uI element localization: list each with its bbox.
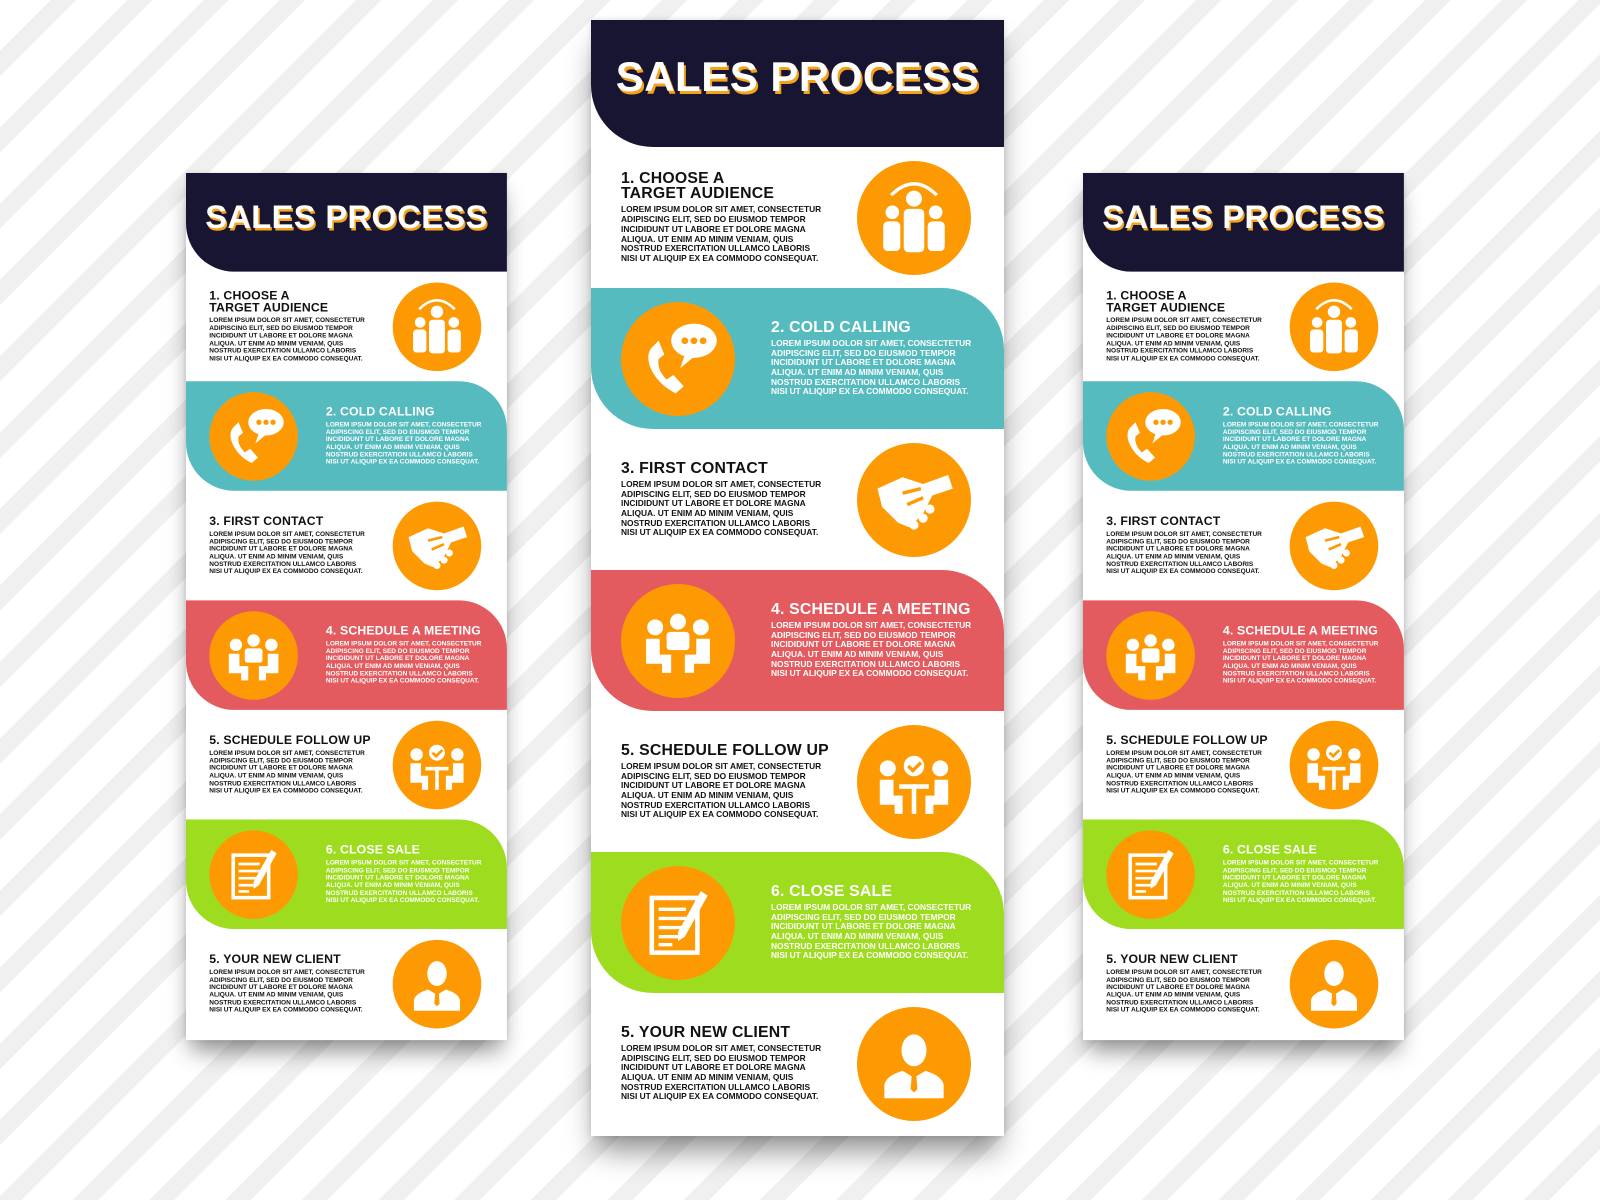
step 4: NISI UT ALIQUIP EX EA COMMODO CONSEQUAT. xyxy=(1223,677,1376,685)
step 5: LOREM IPSUM DOLOR SIT AMET, CONSECTETUR xyxy=(209,749,365,756)
step 5: NOSTRUD EXERCITATION ULLAMCO LABORIS xyxy=(621,800,810,810)
step 2: ADIPISCING ELIT, SED DO EIUSMOD TEMPOR xyxy=(1223,428,1366,435)
step 3: LOREM IPSUM DOLOR SIT AMET, CONSECTETUR xyxy=(1106,530,1262,537)
step 1: TARGET AUDIENCE xyxy=(621,185,774,202)
step 6: NOSTRUD EXERCITATION ULLAMCO LABORIS xyxy=(1223,888,1370,896)
step 4: ALIQUA. UT ENIM AD MINIM VENIAM, QUIS xyxy=(1223,662,1357,670)
step 4: NOSTRUD EXERCITATION ULLAMCO LABORIS xyxy=(771,659,960,669)
step 3: NOSTRUD EXERCITATION ULLAMCO LABORIS xyxy=(621,518,810,528)
step 7 xyxy=(1106,940,1378,1028)
step 7: 5. YOUR NEW CLIENT xyxy=(1106,953,1238,966)
step 5: ADIPISCING ELIT, SED DO EIUSMOD TEMPOR xyxy=(621,771,806,781)
step 4 xyxy=(591,570,1004,711)
step 4: LOREM IPSUM DOLOR SIT AMET, CONSECTETUR xyxy=(771,620,971,630)
step 7: LOREM IPSUM DOLOR SIT AMET, CONSECTETUR xyxy=(209,968,365,976)
step 5: ADIPISCING ELIT, SED DO EIUSMOD TEMPOR xyxy=(209,756,353,764)
step 6: INCIDIDUNT UT LABORE ET DOLORE MAGNA xyxy=(326,873,469,881)
step 5 xyxy=(209,720,482,810)
step 3: ADIPISCING ELIT, SED DO EIUSMOD TEMPOR xyxy=(621,489,806,499)
step 4: LOREM IPSUM DOLOR SIT AMET, CONSECTETUR xyxy=(326,639,481,647)
step 1: ALIQUA. UT ENIM AD MINIM VENIAM, QUIS xyxy=(1106,339,1240,347)
step 2: NISI UT ALIQUIP EX EA COMMODO CONSEQUAT. xyxy=(1223,458,1376,465)
step 7: NOSTRUD EXERCITATION ULLAMCO LABORIS xyxy=(209,998,356,1006)
step 7: INCIDIDUNT UT LABORE ET DOLORE MAGNA xyxy=(1106,983,1250,991)
step 5: INCIDIDUNT UT LABORE ET DOLORE MAGNA xyxy=(1106,764,1250,772)
step 6 xyxy=(1083,819,1404,929)
header: SALES PROCESS xyxy=(616,53,979,100)
step 2: ALIQUA. UT ENIM AD MINIM VENIAM, QUIS xyxy=(326,443,460,450)
step 1: NISI UT ALIQUIP EX EA COMMODO CONSEQUAT. xyxy=(209,354,363,362)
step 6: 6. CLOSE SALE xyxy=(326,843,420,857)
step 6: LOREM IPSUM DOLOR SIT AMET, CONSECTETUR xyxy=(326,858,481,866)
step 3: LOREM IPSUM DOLOR SIT AMET, CONSECTETUR xyxy=(209,530,365,537)
step 6: LOREM IPSUM DOLOR SIT AMET, CONSECTETUR xyxy=(1223,858,1378,866)
step 2 xyxy=(591,288,1004,429)
header: SALES PROCESS xyxy=(1102,199,1385,235)
step 3 xyxy=(621,443,971,557)
step 5: ADIPISCING ELIT, SED DO EIUSMOD TEMPOR xyxy=(1106,756,1250,764)
step 7: NISI UT ALIQUIP EX EA COMMODO CONSEQUAT. xyxy=(209,1005,363,1013)
step 5: INCIDIDUNT UT LABORE ET DOLORE MAGNA xyxy=(621,780,806,790)
header: SALES PROCESS xyxy=(205,199,488,235)
step 4 xyxy=(1083,600,1404,710)
step 7: INCIDIDUNT UT LABORE ET DOLORE MAGNA xyxy=(621,1062,806,1072)
step 5: INCIDIDUNT UT LABORE ET DOLORE MAGNA xyxy=(209,764,353,772)
step 1: NISI UT ALIQUIP EX EA COMMODO CONSEQUAT. xyxy=(1106,354,1260,362)
step 1: NOSTRUD EXERCITATION ULLAMCO LABORIS xyxy=(209,346,356,354)
step 1 xyxy=(209,282,482,372)
step 5: LOREM IPSUM DOLOR SIT AMET, CONSECTETUR xyxy=(621,761,821,771)
step 6: LOREM IPSUM DOLOR SIT AMET, CONSECTETUR xyxy=(771,902,971,912)
step 2: LOREM IPSUM DOLOR SIT AMET, CONSECTETUR xyxy=(326,420,481,428)
step 6: 6. CLOSE SALE xyxy=(1223,843,1317,857)
step 4: ADIPISCING ELIT, SED DO EIUSMOD TEMPOR xyxy=(1223,647,1366,654)
step 6: ADIPISCING ELIT, SED DO EIUSMOD TEMPOR xyxy=(1223,866,1366,874)
step 5: ALIQUA. UT ENIM AD MINIM VENIAM, QUIS xyxy=(209,771,343,779)
header xyxy=(1083,173,1404,272)
step 1: ADIPISCING ELIT, SED DO EIUSMOD TEMPOR xyxy=(621,214,806,224)
step 7: NISI UT ALIQUIP EX EA COMMODO CONSEQUAT. xyxy=(1106,1005,1260,1013)
step 4: 4. SCHEDULE A MEETING xyxy=(1223,624,1378,638)
step 1: ADIPISCING ELIT, SED DO EIUSMOD TEMPOR xyxy=(1106,324,1250,332)
step 5: ALIQUA. UT ENIM AD MINIM VENIAM, QUIS xyxy=(1106,771,1240,779)
step 5: 5. SCHEDULE FOLLOW UP xyxy=(1106,734,1268,747)
step 4: ALIQUA. UT ENIM AD MINIM VENIAM, QUIS xyxy=(771,649,943,659)
step 5: NISI UT ALIQUIP EX EA COMMODO CONSEQUAT. xyxy=(621,809,818,819)
step 4 xyxy=(186,600,507,710)
step 3: 3. FIRST CONTACT xyxy=(209,515,323,528)
step 7: LOREM IPSUM DOLOR SIT AMET, CONSECTETUR xyxy=(621,1043,821,1053)
step 1: 1. CHOOSE A xyxy=(621,170,724,187)
step 7: NOSTRUD EXERCITATION ULLAMCO LABORIS xyxy=(1106,998,1253,1006)
step 3: ADIPISCING ELIT, SED DO EIUSMOD TEMPOR xyxy=(209,537,353,545)
step 1: ALIQUA. UT ENIM AD MINIM VENIAM, QUIS xyxy=(209,339,343,347)
step 1: TARGET AUDIENCE xyxy=(209,302,328,315)
step 3: NISI UT ALIQUIP EX EA COMMODO CONSEQUAT. xyxy=(1106,567,1260,575)
step 2 xyxy=(186,381,507,491)
step 4: LOREM IPSUM DOLOR SIT AMET, CONSECTETUR xyxy=(1223,639,1378,647)
step 2: NISI UT ALIQUIP EX EA COMMODO CONSEQUAT. xyxy=(771,386,968,396)
step 7: NISI UT ALIQUIP EX EA COMMODO CONSEQUAT. xyxy=(621,1091,818,1101)
step 3: LOREM IPSUM DOLOR SIT AMET, CONSECTETUR xyxy=(621,479,821,489)
step 4: ADIPISCING ELIT, SED DO EIUSMOD TEMPOR xyxy=(771,630,956,640)
step 1: INCIDIDUNT UT LABORE ET DOLORE MAGNA xyxy=(621,224,806,234)
step 2: NOSTRUD EXERCITATION ULLAMCO LABORIS xyxy=(326,450,473,458)
panel: left banner xyxy=(186,173,507,1040)
step 1: TARGET AUDIENCE xyxy=(1106,302,1225,315)
step 2: NOSTRUD EXERCITATION ULLAMCO LABORIS xyxy=(771,377,960,387)
step 1: ALIQUA. UT ENIM AD MINIM VENIAM, QUIS xyxy=(621,234,793,244)
step 4: NISI UT ALIQUIP EX EA COMMODO CONSEQUAT. xyxy=(326,677,479,685)
step 7: ADIPISCING ELIT, SED DO EIUSMOD TEMPOR xyxy=(1106,975,1250,983)
step 5: NOSTRUD EXERCITATION ULLAMCO LABORIS xyxy=(209,779,356,787)
step 3: NISI UT ALIQUIP EX EA COMMODO CONSEQUAT. xyxy=(621,527,818,537)
step 7: ADIPISCING ELIT, SED DO EIUSMOD TEMPOR xyxy=(621,1053,806,1063)
step 1 xyxy=(621,161,971,275)
step 6: NOSTRUD EXERCITATION ULLAMCO LABORIS xyxy=(771,941,960,951)
step 3: NISI UT ALIQUIP EX EA COMMODO CONSEQUAT. xyxy=(209,567,363,575)
step 2: ALIQUA. UT ENIM AD MINIM VENIAM, QUIS xyxy=(1223,443,1357,450)
step 7: INCIDIDUNT UT LABORE ET DOLORE MAGNA xyxy=(209,983,353,991)
step 3 xyxy=(209,502,482,590)
step 4: NOSTRUD EXERCITATION ULLAMCO LABORIS xyxy=(1223,669,1370,677)
panel: right banner xyxy=(1083,173,1404,1040)
step 4: ALIQUA. UT ENIM AD MINIM VENIAM, QUIS xyxy=(326,662,460,670)
step 7: ALIQUA. UT ENIM AD MINIM VENIAM, QUIS xyxy=(621,1072,793,1082)
step 4: 4. SCHEDULE A MEETING xyxy=(326,624,481,638)
step 1: INCIDIDUNT UT LABORE ET DOLORE MAGNA xyxy=(209,331,353,339)
step 5: NISI UT ALIQUIP EX EA COMMODO CONSEQUAT. xyxy=(209,786,363,794)
step 7: 5. YOUR NEW CLIENT xyxy=(209,953,341,966)
step 2: LOREM IPSUM DOLOR SIT AMET, CONSECTETUR xyxy=(1223,420,1378,428)
step 6: NISI UT ALIQUIP EX EA COMMODO CONSEQUAT. xyxy=(326,896,479,904)
step 6: ADIPISCING ELIT, SED DO EIUSMOD TEMPOR xyxy=(771,912,956,922)
step 3: ADIPISCING ELIT, SED DO EIUSMOD TEMPOR xyxy=(1106,537,1250,545)
step 3: ALIQUA. UT ENIM AD MINIM VENIAM, QUIS xyxy=(209,552,343,560)
step 7: 5. YOUR NEW CLIENT xyxy=(621,1024,790,1041)
step 6: INCIDIDUNT UT LABORE ET DOLORE MAGNA xyxy=(771,921,956,931)
step 3: NOSTRUD EXERCITATION ULLAMCO LABORIS xyxy=(209,560,356,567)
step 6: NISI UT ALIQUIP EX EA COMMODO CONSEQUAT. xyxy=(1223,896,1376,904)
step 3: INCIDIDUNT UT LABORE ET DOLORE MAGNA xyxy=(621,498,806,508)
step 5 xyxy=(1106,720,1378,810)
step 4: 4. SCHEDULE A MEETING xyxy=(771,601,971,618)
step 2: ADIPISCING ELIT, SED DO EIUSMOD TEMPOR xyxy=(771,348,956,358)
step 1: LOREM IPSUM DOLOR SIT AMET, CONSECTETUR xyxy=(621,204,821,214)
step 4: INCIDIDUNT UT LABORE ET DOLORE MAGNA xyxy=(771,639,956,649)
header xyxy=(186,173,507,272)
step 4: INCIDIDUNT UT LABORE ET DOLORE MAGNA xyxy=(326,654,469,662)
step 2: INCIDIDUNT UT LABORE ET DOLORE MAGNA xyxy=(1223,435,1366,443)
step 1: NOSTRUD EXERCITATION ULLAMCO LABORIS xyxy=(1106,346,1253,354)
step 2: LOREM IPSUM DOLOR SIT AMET, CONSECTETUR xyxy=(771,338,971,348)
step 3 xyxy=(1106,502,1378,590)
step 3: INCIDIDUNT UT LABORE ET DOLORE MAGNA xyxy=(209,545,353,552)
step 7: ALIQUA. UT ENIM AD MINIM VENIAM, QUIS xyxy=(209,990,343,998)
step 5: 5. SCHEDULE FOLLOW UP xyxy=(209,734,371,747)
step 1: NOSTRUD EXERCITATION ULLAMCO LABORIS xyxy=(621,243,810,253)
step 4: ADIPISCING ELIT, SED DO EIUSMOD TEMPOR xyxy=(326,647,469,654)
step 5: NISI UT ALIQUIP EX EA COMMODO CONSEQUAT. xyxy=(1106,786,1260,794)
step 6: ADIPISCING ELIT, SED DO EIUSMOD TEMPOR xyxy=(326,866,469,874)
step 2: 2. COLD CALLING xyxy=(771,319,911,336)
step 2 xyxy=(1083,381,1404,491)
step 2: NISI UT ALIQUIP EX EA COMMODO CONSEQUAT. xyxy=(326,458,479,465)
step 3: INCIDIDUNT UT LABORE ET DOLORE MAGNA xyxy=(1106,545,1250,552)
step 5 xyxy=(621,725,971,839)
step 3: ALIQUA. UT ENIM AD MINIM VENIAM, QUIS xyxy=(1106,552,1240,560)
step 6 xyxy=(186,819,507,929)
step 5: 5. SCHEDULE FOLLOW UP xyxy=(621,742,829,759)
step 4: INCIDIDUNT UT LABORE ET DOLORE MAGNA xyxy=(1223,654,1366,662)
step 1: ADIPISCING ELIT, SED DO EIUSMOD TEMPOR xyxy=(209,324,353,332)
step 1: LOREM IPSUM DOLOR SIT AMET, CONSECTETUR xyxy=(1106,316,1262,324)
step 7: NOSTRUD EXERCITATION ULLAMCO LABORIS xyxy=(621,1082,810,1092)
step 1: NISI UT ALIQUIP EX EA COMMODO CONSEQUAT. xyxy=(621,253,818,263)
step 1: 1. CHOOSE A xyxy=(1106,290,1187,303)
step 7 xyxy=(209,940,482,1028)
step 2: ALIQUA. UT ENIM AD MINIM VENIAM, QUIS xyxy=(771,367,943,377)
step 1: LOREM IPSUM DOLOR SIT AMET, CONSECTETUR xyxy=(209,316,365,324)
step 2: INCIDIDUNT UT LABORE ET DOLORE MAGNA xyxy=(771,357,956,367)
step 5: NOSTRUD EXERCITATION ULLAMCO LABORIS xyxy=(1106,779,1253,787)
step 2: 2. COLD CALLING xyxy=(1223,405,1332,418)
step 1: INCIDIDUNT UT LABORE ET DOLORE MAGNA xyxy=(1106,331,1250,339)
step 2: ADIPISCING ELIT, SED DO EIUSMOD TEMPOR xyxy=(326,428,469,435)
step 4: NOSTRUD EXERCITATION ULLAMCO LABORIS xyxy=(326,669,473,677)
step 6: NISI UT ALIQUIP EX EA COMMODO CONSEQUAT. xyxy=(771,950,968,960)
step 3: 3. FIRST CONTACT xyxy=(1106,515,1220,528)
step 6 xyxy=(591,852,1004,993)
step 3: ALIQUA. UT ENIM AD MINIM VENIAM, QUIS xyxy=(621,508,793,518)
step 2: INCIDIDUNT UT LABORE ET DOLORE MAGNA xyxy=(326,435,469,443)
step 7: LOREM IPSUM DOLOR SIT AMET, CONSECTETUR xyxy=(1106,968,1262,976)
step 3: 3. FIRST CONTACT xyxy=(621,460,768,477)
step 2: NOSTRUD EXERCITATION ULLAMCO LABORIS xyxy=(1223,450,1370,458)
step 6: INCIDIDUNT UT LABORE ET DOLORE MAGNA xyxy=(1223,873,1366,881)
step 1: 1. CHOOSE A xyxy=(209,290,290,303)
step 6: ALIQUA. UT ENIM AD MINIM VENIAM, QUIS xyxy=(771,931,943,941)
step 6: NOSTRUD EXERCITATION ULLAMCO LABORIS xyxy=(326,888,473,896)
step 7: ALIQUA. UT ENIM AD MINIM VENIAM, QUIS xyxy=(1106,990,1240,998)
step 3: NOSTRUD EXERCITATION ULLAMCO LABORIS xyxy=(1106,560,1253,567)
step 7: ADIPISCING ELIT, SED DO EIUSMOD TEMPOR xyxy=(209,975,353,983)
step 6: 6. CLOSE SALE xyxy=(771,883,892,900)
step 6: ALIQUA. UT ENIM AD MINIM VENIAM, QUIS xyxy=(326,881,460,889)
step 6: ALIQUA. UT ENIM AD MINIM VENIAM, QUIS xyxy=(1223,881,1357,889)
step 7 xyxy=(621,1007,971,1121)
panel: center banner xyxy=(591,20,1004,1136)
step 5: ALIQUA. UT ENIM AD MINIM VENIAM, QUIS xyxy=(621,790,793,800)
step 5: LOREM IPSUM DOLOR SIT AMET, CONSECTETUR xyxy=(1106,749,1262,756)
step 4: NISI UT ALIQUIP EX EA COMMODO CONSEQUAT. xyxy=(771,668,968,678)
step 2: 2. COLD CALLING xyxy=(326,405,435,418)
header xyxy=(591,20,1004,147)
step 1 xyxy=(1106,282,1378,372)
